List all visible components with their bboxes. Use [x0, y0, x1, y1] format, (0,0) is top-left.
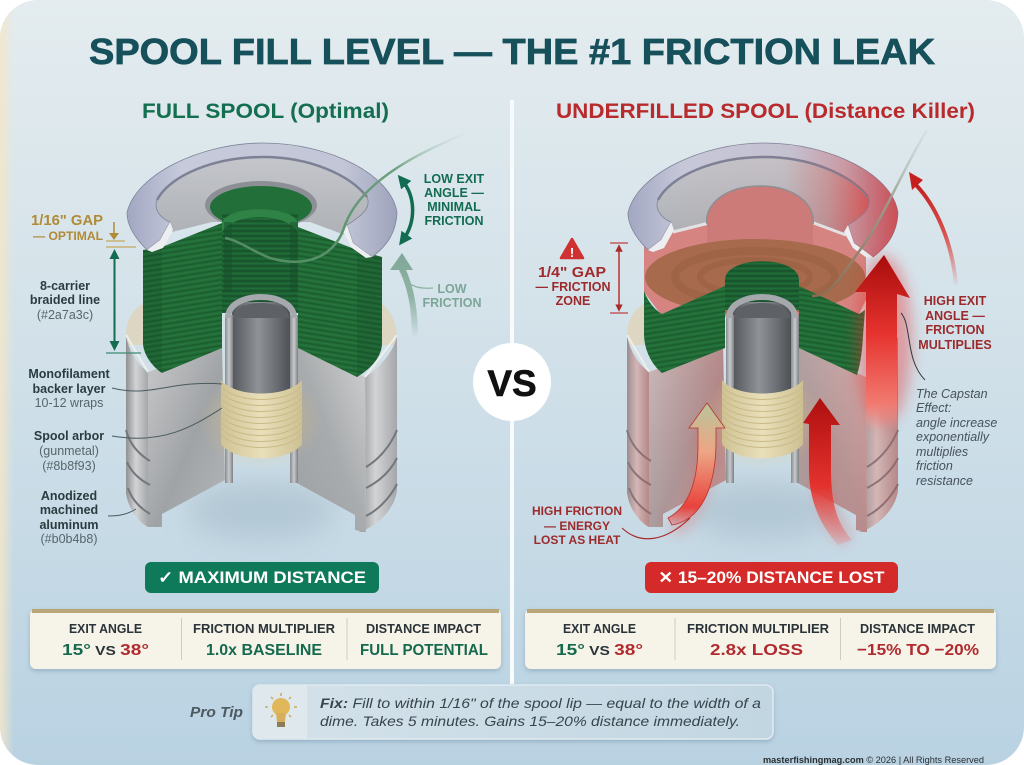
label: anodized aluminum [39, 489, 136, 546]
gap label: 1/4 inch: 1/4" GAP [538, 264, 606, 281]
badge: maximum distance [145, 562, 379, 593]
lower left heat arrow [668, 403, 725, 525]
label: low friction: LOW [437, 282, 467, 296]
gap label: 1/4 inch: — FRICTION [536, 280, 610, 294]
tip text [320, 695, 761, 729]
label: spool arbor: (gunmetal) [39, 444, 99, 458]
stat: friction multiplier: FRICTION MULTIPLIER [687, 622, 829, 636]
stat: distance impact: DISTANCE IMPACT [366, 622, 481, 636]
dimension arrow: line height [106, 254, 141, 353]
label: backer layer: backer layer [33, 382, 106, 396]
panel: underfilled spool [525, 100, 997, 669]
VS badge: VS [487, 363, 537, 404]
gap label: 1/4 inch: ZONE [556, 294, 590, 308]
label: braided line: 8-carrier [40, 279, 90, 293]
label: high exit angle: ANGLE — [925, 309, 985, 323]
stat: exit angle [62, 622, 149, 659]
label: high exit angle: HIGH EXIT [924, 294, 987, 308]
label: low friction [422, 282, 482, 310]
lower right heat arrow [803, 398, 852, 545]
label: braided line [30, 279, 100, 322]
heading: underfilled spool: UNDERFILLED SPOOL (Distance Killer) [556, 100, 975, 123]
gap label: 1/4 inch [536, 264, 610, 308]
badge: maximum distance: ✓ MAXIMUM DISTANCE [158, 569, 366, 587]
tip text: Fix: Fill to within 1/16" of the spool lip — equal to the width of a [320, 695, 761, 711]
label: high friction: HIGH FRICTION [532, 504, 622, 518]
warning icon: ! [570, 245, 574, 260]
label: high friction: LOST AS HEAT [534, 533, 621, 547]
illustration: underfilled spool cutaway [627, 143, 898, 532]
illustration: full spool cutaway [126, 143, 397, 532]
fishing line [225, 132, 470, 262]
stat: distance impact: DISTANCE IMPACT [860, 622, 975, 636]
dimension arrow: friction zone [610, 243, 628, 313]
badge: distance lost [645, 562, 898, 593]
note: capstan effect: Effect: [916, 401, 951, 415]
label: low exit angle [424, 172, 485, 228]
center divider [510, 100, 514, 684]
stats card: underfilled spool [525, 609, 996, 669]
stat: exit angle: 15° VS 38° [62, 642, 149, 659]
callout: pro tip [253, 685, 773, 739]
arrow: low exit angle [402, 180, 413, 240]
label: low exit angle: MINIMAL [427, 200, 481, 214]
label: low friction: FRICTION [422, 296, 482, 310]
label: high exit angle: FRICTION [925, 323, 985, 337]
gap label: 1/16 inch: 1/16" GAP [31, 212, 103, 229]
tip text: dime. Takes 5 minutes. Gains 15–20% distance immediately. [320, 713, 740, 729]
label: high friction: — ENERGY [544, 519, 610, 533]
gap label: 1/16 inch [31, 212, 136, 247]
stats card: full spool [30, 609, 501, 669]
note: capstan effect: friction [916, 459, 953, 473]
curved red arrow [909, 172, 956, 285]
big red arrow [855, 255, 910, 430]
label: spool arbor [34, 408, 222, 473]
glow behind big red arrow [856, 255, 912, 425]
stat: friction multiplier [687, 622, 829, 659]
note: capstan effect: exponentially [916, 430, 990, 444]
note: capstan effect: angle increase [916, 416, 997, 430]
label: backer layer: 10-12 wraps [35, 396, 103, 410]
label: backer layer [28, 367, 222, 410]
label: high friction [532, 504, 690, 547]
label: anodized aluminum: (#b0b4b8) [40, 532, 98, 546]
panel: full spool [28, 100, 501, 669]
arrow: low friction [390, 253, 433, 338]
label: anodized aluminum: machined [40, 503, 98, 517]
stat: friction multiplier [193, 622, 335, 659]
gap label: 1/16 inch: — OPTIMAL [33, 229, 103, 243]
note: capstan effect: resistance [916, 474, 973, 488]
stat: exit angle: EXIT ANGLE [69, 622, 142, 636]
stat: distance impact: FULL POTENTIAL [360, 642, 488, 659]
label: low exit angle: ANGLE — [424, 186, 484, 200]
note: capstan effect: The Capstan [916, 387, 988, 401]
label: pro tip: Pro Tip [190, 705, 243, 721]
glow behind heat arrows [672, 430, 848, 540]
stat: friction multiplier: 1.0x BASELINE [206, 642, 322, 659]
stat: exit angle [556, 622, 643, 659]
label: spool arbor: (#8b8f93) [42, 459, 96, 473]
label: high exit angle [901, 294, 992, 380]
label: braided line: braided line [30, 293, 100, 307]
label: high exit angle: MULTIPLIES [918, 338, 992, 352]
warning icon [561, 239, 583, 260]
note: capstan effect [916, 387, 997, 488]
label: anodized aluminum: aluminum [39, 518, 99, 532]
label: low exit angle: LOW EXIT [424, 172, 485, 186]
note: capstan effect: multiplies [916, 445, 968, 459]
stat: exit angle: EXIT ANGLE [563, 622, 636, 636]
heading: full spool: FULL SPOOL (Optimal) [142, 100, 389, 123]
fishing line [812, 130, 927, 296]
label: braided line: (#2a7a3c) [37, 308, 93, 322]
stat: friction multiplier: FRICTION MULTIPLIER [193, 622, 335, 636]
stat: distance impact [360, 622, 488, 659]
label: backer layer: Monofilament [28, 367, 110, 381]
stat: distance impact: −15% TO −20% [857, 642, 979, 659]
stat: exit angle: 15° VS 38° [556, 642, 643, 659]
stat: distance impact [857, 622, 979, 659]
icon: lightbulb [265, 693, 297, 727]
label: spool arbor: Spool arbor [34, 429, 104, 443]
label: low exit angle: FRICTION [424, 214, 484, 228]
badge: distance lost: ✕ 15–20% DISTANCE LOST [658, 569, 884, 587]
label: anodized aluminum: Anodized [41, 489, 97, 503]
title: SPOOL FILL LEVEL — THE #1 FRICTION LEAK [89, 31, 935, 72]
stat: friction multiplier: 2.8x LOSS [710, 642, 803, 659]
VS badge [473, 343, 551, 421]
